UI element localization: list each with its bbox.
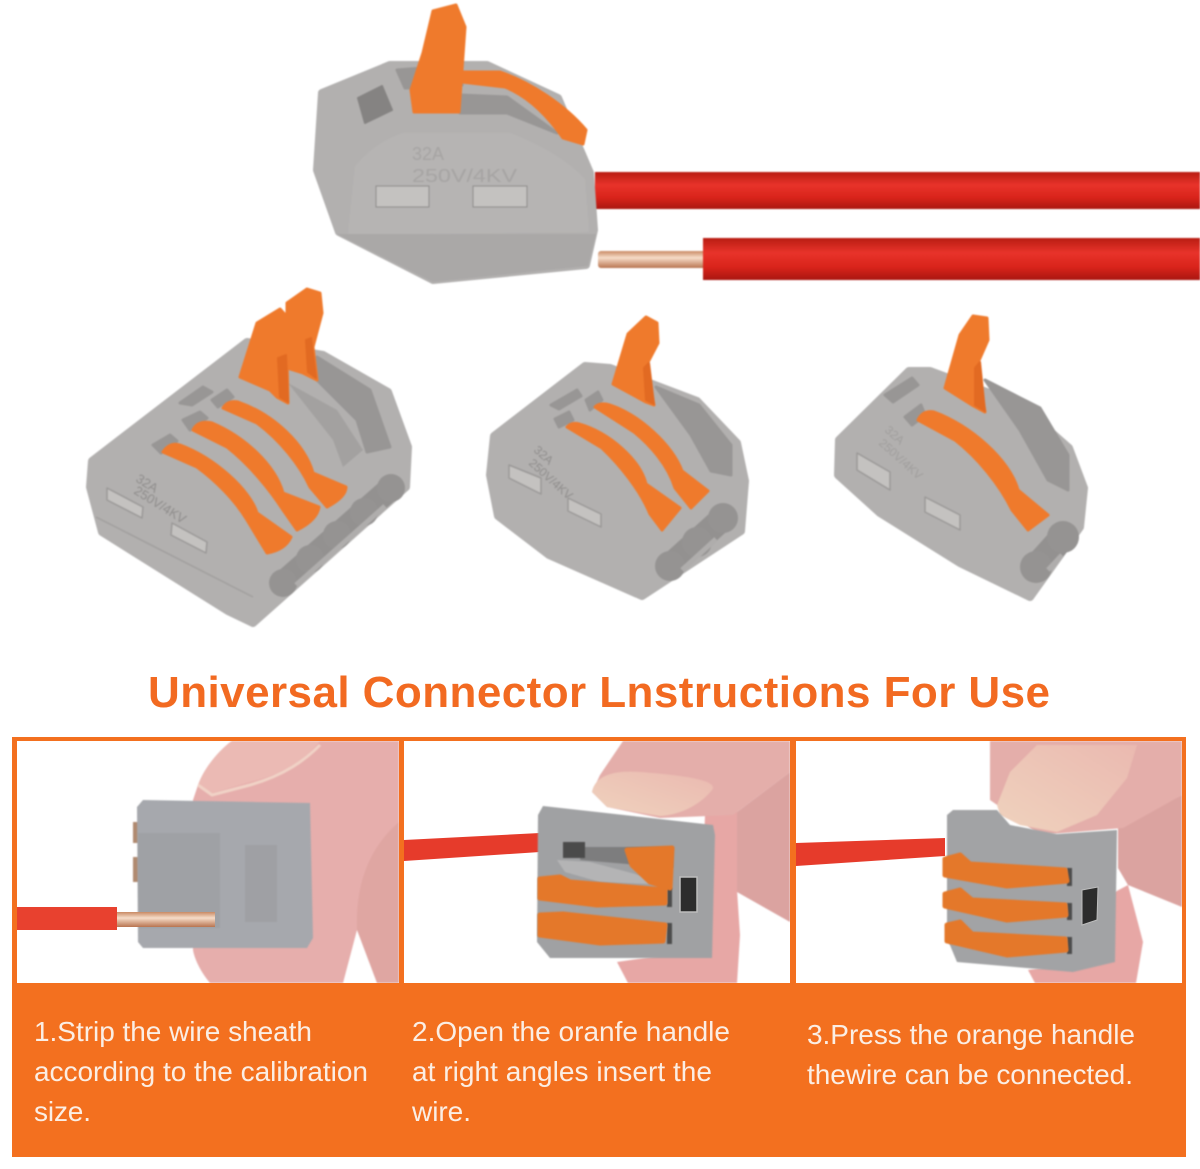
step 2 text [411, 1016, 730, 1127]
top connector with red wires [317, 5, 1200, 282]
red wire upper [595, 172, 1200, 209]
wire [404, 833, 540, 861]
photo 2 [404, 741, 790, 983]
panel background [12, 737, 1186, 1157]
side slot [680, 877, 697, 912]
three way body [490, 366, 745, 596]
two way rear recess [985, 380, 1068, 490]
five way rib [288, 383, 363, 467]
top connector lower skirt [337, 234, 596, 282]
hand [990, 741, 1182, 983]
two way body [838, 371, 1084, 597]
five way body [90, 342, 408, 623]
top connector square window [358, 86, 392, 123]
top connector front face [350, 135, 587, 233]
two way upright lever [945, 316, 988, 412]
five way wire holes [269, 474, 405, 597]
five way label: 250V/4KV [131, 483, 189, 527]
step 2 text: 2.Open the oranfe handle [412, 1016, 730, 1047]
top connector slots [376, 186, 527, 207]
step 1 text: size. [34, 1096, 91, 1127]
top connector body [317, 65, 594, 280]
five way label: 32A [133, 471, 161, 496]
step 1 text: 1.Strip the wire sheath [34, 1016, 312, 1047]
photo 1 [17, 741, 399, 983]
copper core [117, 912, 215, 927]
hand [592, 741, 790, 983]
five way orange handles [163, 402, 346, 553]
top connector label: 250V/4KV [412, 166, 517, 186]
connector: five way [90, 289, 408, 623]
wire [17, 907, 117, 930]
connector: three way [490, 317, 745, 596]
three way wire holes [655, 503, 738, 581]
photo 3 [796, 741, 1182, 983]
title: Universal Connector Lnstructions For Use [148, 668, 1050, 717]
five way top slots [153, 387, 233, 453]
step 1 text: according to the calibration [34, 1056, 368, 1087]
three way label: 32A [531, 443, 556, 468]
side slot [1082, 887, 1098, 925]
five way rear recess [317, 357, 390, 452]
two way wire holes [1020, 521, 1079, 583]
connector [537, 806, 715, 958]
orange handles [945, 855, 1067, 955]
connector: two way [838, 316, 1084, 597]
hand [193, 741, 399, 983]
two way label: 32A [882, 423, 907, 448]
red wire lower with stripped copper end [598, 238, 1200, 280]
step 3 text: 3.Press the orange handle [807, 1019, 1135, 1050]
connector [133, 800, 313, 948]
three way orange handles [567, 404, 708, 530]
two way top slots [885, 378, 925, 425]
orange handles [540, 848, 672, 943]
five way seam [96, 517, 253, 597]
panel: instructions [12, 737, 1186, 1157]
step 2 text: at right angles insert the [412, 1056, 712, 1087]
five way side slots [107, 488, 207, 553]
five way upright levers [240, 289, 322, 403]
three way top slots [551, 390, 602, 427]
top connector back handle [462, 72, 586, 144]
step 3 text: thewire can be connected. [807, 1059, 1133, 1090]
top connector label: 32A [412, 144, 444, 164]
three way label: 250V/4KV [526, 456, 576, 502]
three way rear recess [656, 387, 731, 475]
three way upright lever [613, 317, 658, 405]
step 3 text [807, 1019, 1135, 1090]
step 2 text: wire. [411, 1096, 471, 1127]
two way label: 250V/4KV [876, 436, 926, 482]
three way side slots [509, 465, 601, 527]
top connector label [412, 144, 517, 186]
top connector rear recess [460, 95, 557, 133]
two way orange handle [918, 412, 1048, 530]
connector [947, 810, 1117, 972]
wire [796, 838, 945, 866]
step 1 text [34, 1016, 368, 1127]
top connector lever [411, 5, 465, 112]
two way side slots [857, 453, 960, 530]
